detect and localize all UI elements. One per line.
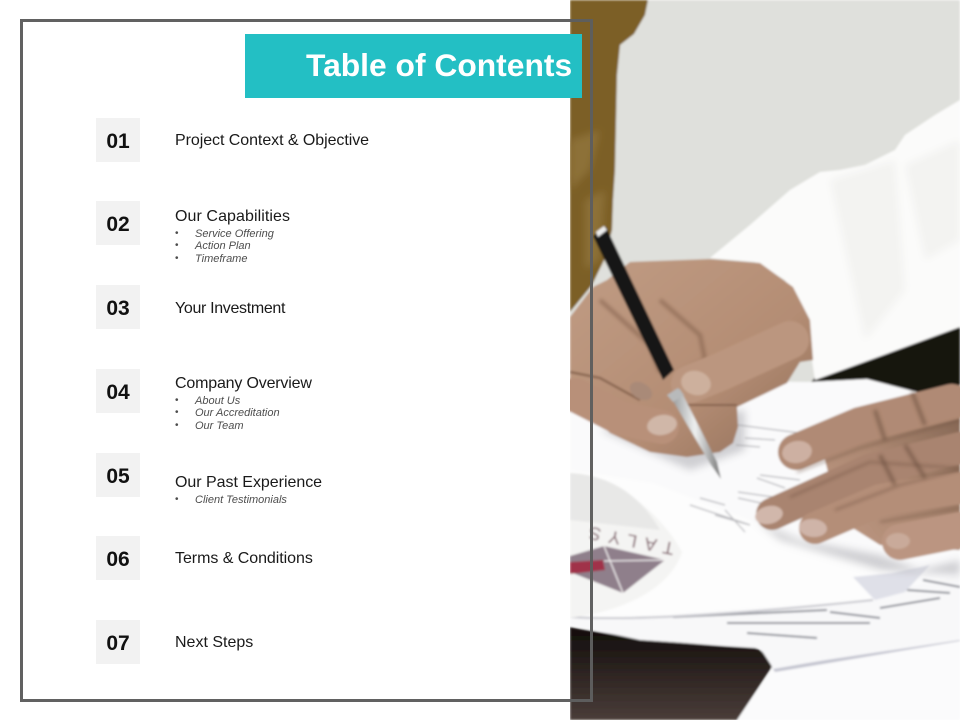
item 02 sub-list: Timeframe: [195, 252, 247, 264]
item 07 number: [96, 620, 140, 664]
item 02 number: 02: [106, 213, 130, 236]
item 06 number: [96, 536, 140, 580]
item 02 number: [96, 201, 140, 245]
left hand: [570, 259, 813, 457]
white content panel: [0, 0, 570, 720]
item 07 label: Next Steps: [175, 634, 253, 651]
title banner: [245, 34, 582, 98]
logo mark: [570, 546, 665, 593]
item 01 number: [96, 118, 140, 162]
item 03 number: 03: [106, 297, 130, 320]
item 06 label: Terms & Conditions: [175, 550, 313, 567]
item 03 label: Your Investment: [175, 300, 285, 317]
item 01 label: Project Context & Objective: [175, 132, 369, 149]
item 02 sub-list: Action Plan: [195, 240, 251, 252]
item 07 number: 07: [106, 632, 130, 655]
logo wordmark: TALYS: [579, 521, 676, 559]
item 05 label: Our Past Experience: [175, 474, 322, 491]
item 05 number: 05: [106, 465, 130, 488]
shirt cuff: [710, 100, 960, 380]
item 04 sub-list: Our Accreditation: [195, 407, 280, 419]
small print on sheet: [690, 425, 800, 532]
logo circle area: [570, 473, 682, 618]
item 04 label: Company Overview: [175, 375, 312, 392]
frame outline: [20, 19, 593, 702]
pen: [593, 226, 721, 479]
item 04 sub-list: Our Team: [195, 420, 244, 432]
item 05 number: [96, 453, 140, 497]
photo: hands signing a document: [570, 0, 960, 720]
item 04 number: [96, 369, 140, 413]
item 06 number: 06: [106, 548, 130, 571]
item 04 sub-list: About Us: [195, 394, 240, 406]
item 05 sub-list: Client Testimonials: [195, 494, 287, 506]
item 02 label: Our Capabilities: [175, 208, 290, 225]
item 03 number: [96, 285, 140, 329]
item 01 number: 01: [106, 130, 130, 153]
item 02 sub-list: [175, 228, 274, 264]
front sheet fold: [570, 470, 893, 620]
title banner: Table of Contents: [306, 47, 572, 83]
item 02 sub-list: Service Offering: [195, 228, 274, 240]
item 04 sub-list: [175, 394, 280, 432]
right hand: [753, 385, 960, 550]
shadow under hands: [600, 410, 960, 575]
item 04 number: 04: [106, 381, 130, 404]
